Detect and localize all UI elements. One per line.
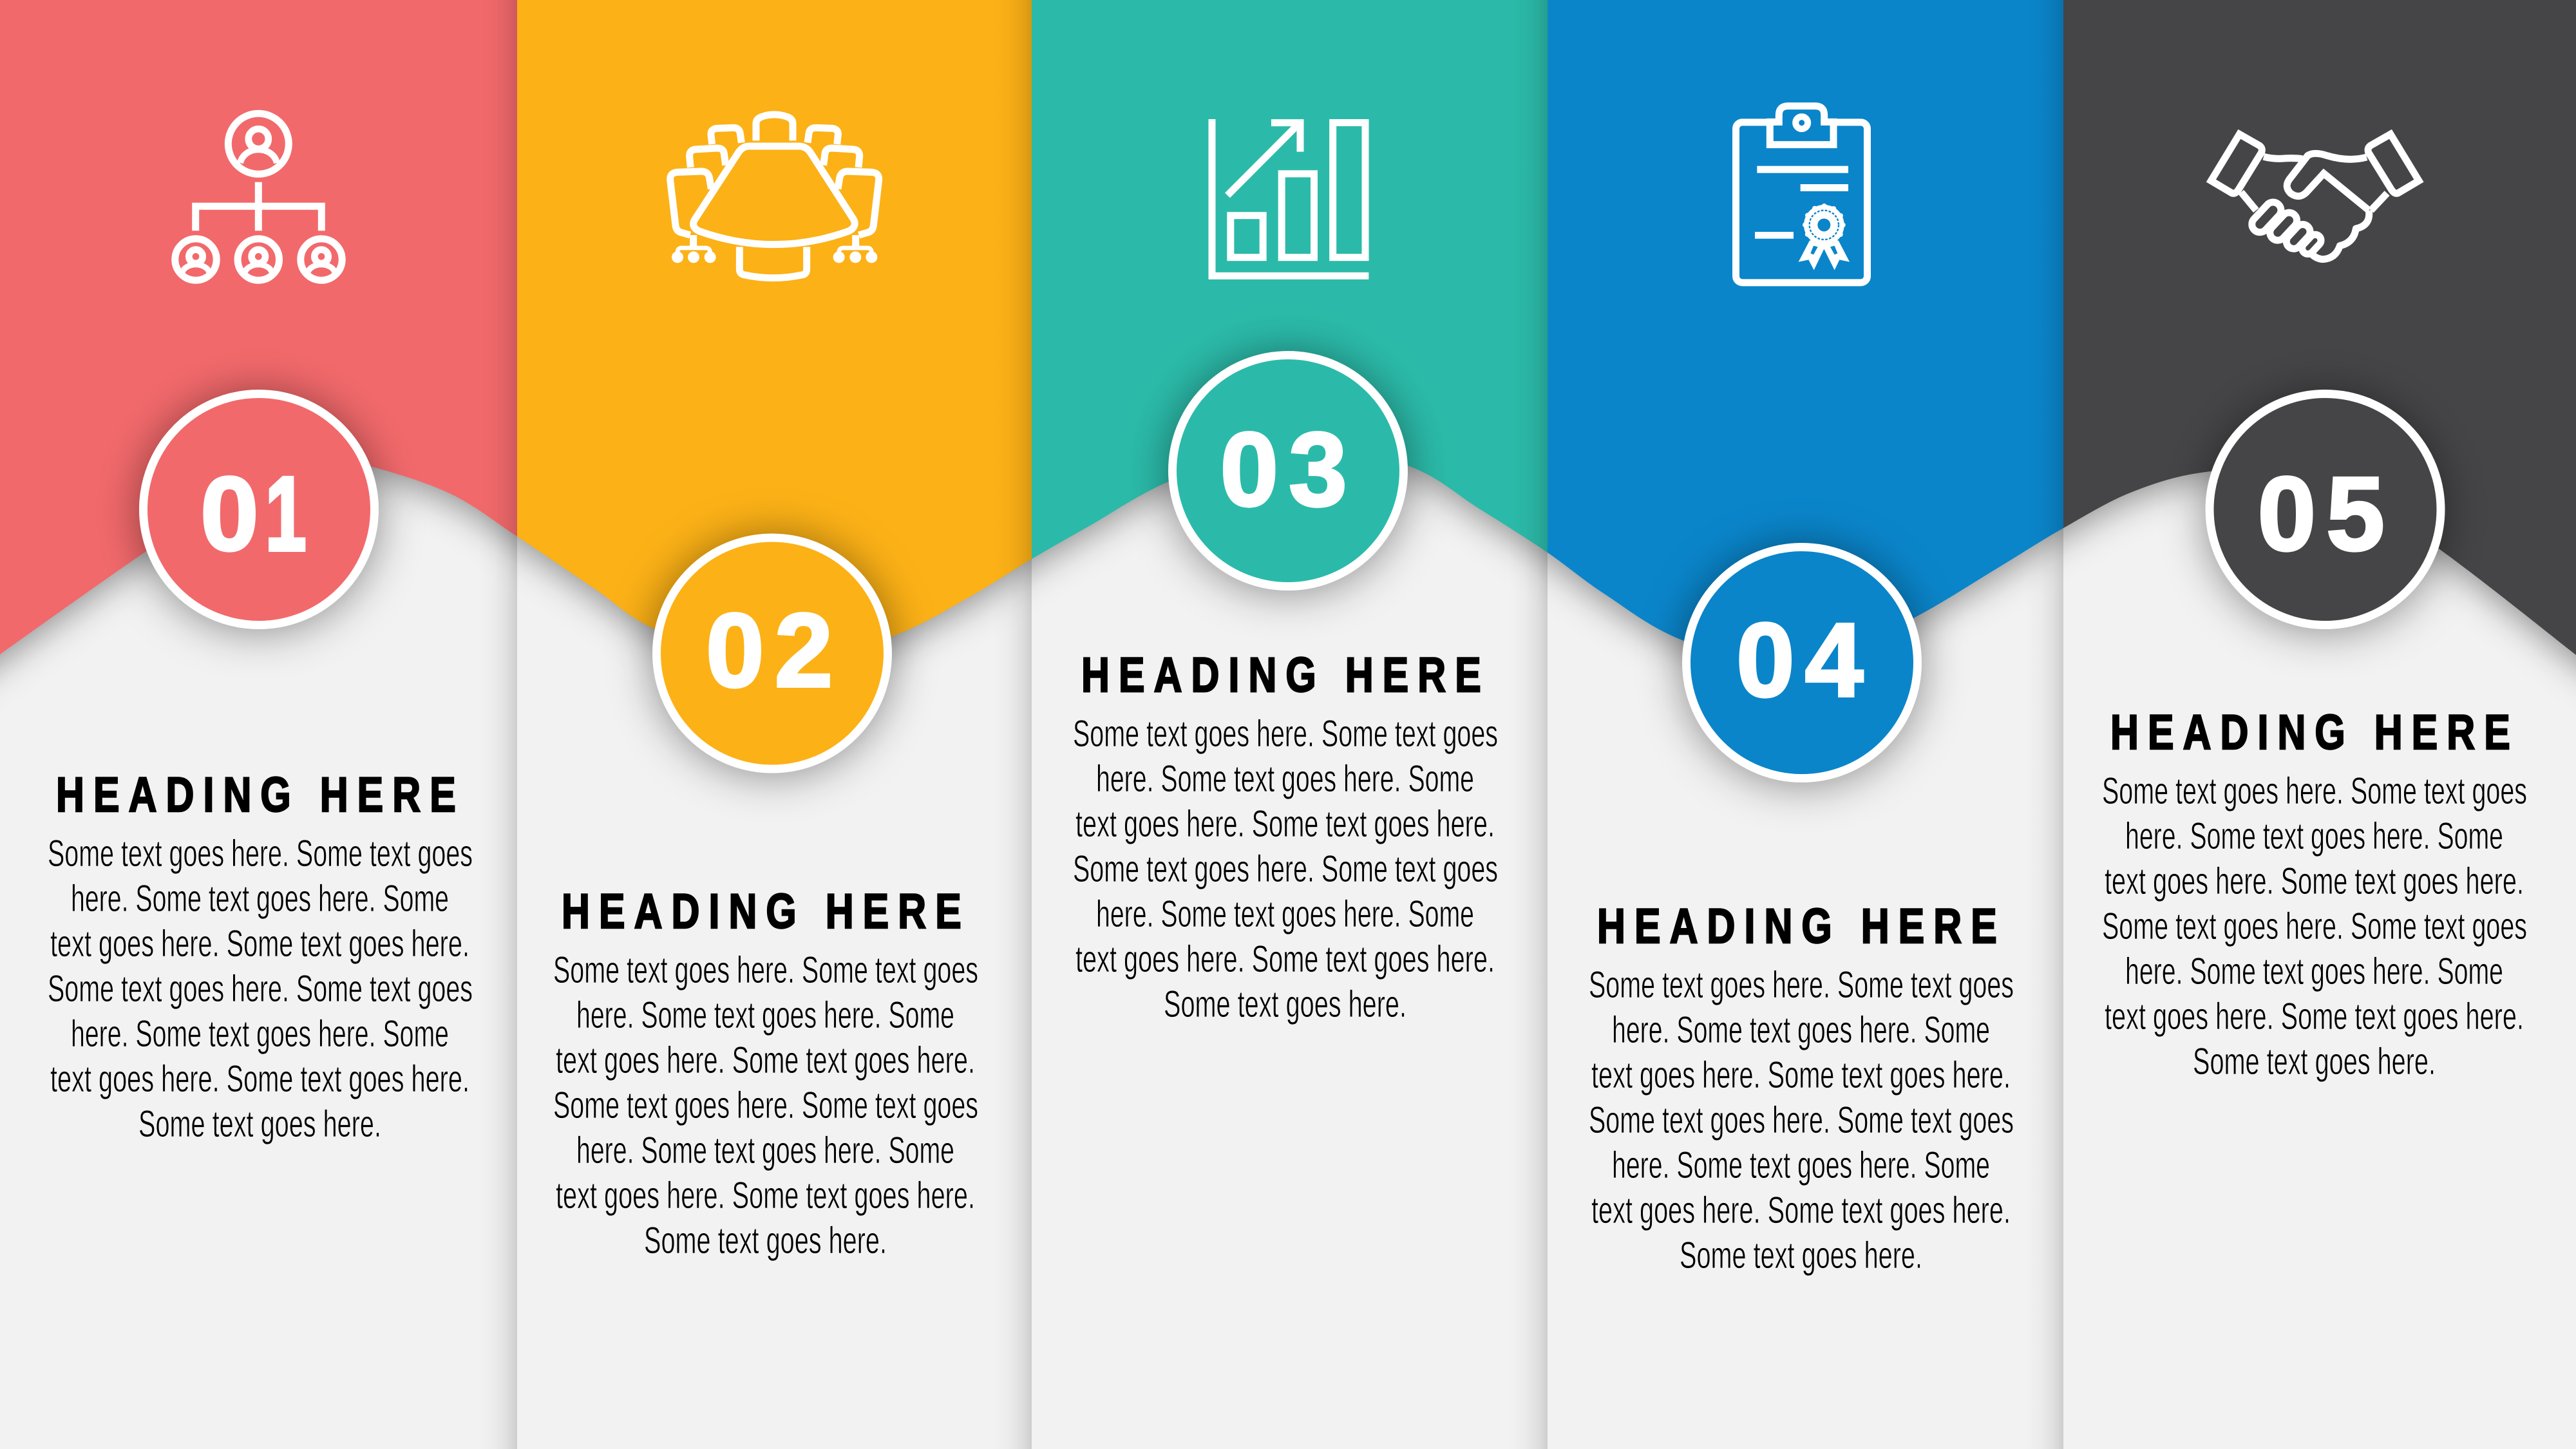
number badge 04: 04 (1736, 601, 1873, 719)
panel: column 01 (0, 0, 517, 1449)
text block 02: Some text goes here. Some text goes (553, 949, 978, 991)
text block 04: Some text goes here. Some text goes (1589, 1099, 2014, 1141)
text block 04: text goes here. Some text goes here. (1591, 1054, 2011, 1096)
text block 05: HEADING HERE (2110, 705, 2510, 760)
number badge 02 (652, 536, 892, 775)
number badge 03 (1168, 354, 1408, 593)
text block 04: Some text goes here. Some text goes (1589, 964, 2014, 1006)
text block 02: here. Some text goes here. Some (576, 1130, 954, 1171)
text block 01: Some text goes here. Some text goes (48, 833, 473, 875)
text block 01: text goes here. Some text goes here. (50, 1058, 469, 1100)
text block 04: here. Some text goes here. Some (1612, 1009, 1990, 1051)
text block 03 (1073, 648, 1498, 1025)
icon: org chart (175, 113, 342, 280)
panel: column 05 (2063, 0, 2576, 1083)
text block 02 (553, 884, 978, 1262)
text block 03: text goes here. Some text goes here. (1075, 938, 1495, 980)
icon: boardroom table (670, 115, 879, 278)
text block 02: Some text goes here. Some text goes (553, 1084, 978, 1126)
text block 02: HEADING HERE (562, 884, 961, 939)
text block 04: text goes here. Some text goes here. (1591, 1189, 2011, 1231)
text block 01: text goes here. Some text goes here. (50, 923, 469, 965)
number badge 01: 1 (265, 455, 314, 573)
icon: rising bar chart (1212, 119, 1368, 276)
number badge 01: 0 (200, 455, 269, 573)
teal wave header (1032, 0, 1548, 559)
number badge 05 (2205, 392, 2445, 632)
text block 04: HEADING HERE (1597, 899, 1997, 954)
panel: column 03 (1032, 0, 1548, 1449)
text block 01: HEADING HERE (56, 768, 456, 822)
icon: clipboard certificate (1736, 106, 1867, 283)
text block 05: Some text goes here. (2193, 1041, 2436, 1083)
number badge 01 (139, 392, 379, 632)
text block 02: text goes here. Some text goes here. (556, 1039, 975, 1081)
blue wave header (1548, 0, 2063, 708)
text block 03: Some text goes here. Some text goes (1073, 848, 1498, 890)
text block 03: Some text goes here. Some text goes (1073, 713, 1498, 755)
number badge 02: 02 (706, 591, 843, 709)
text block 04: here. Some text goes here. Some (1612, 1144, 1990, 1186)
text block 01: Some text goes here. (138, 1103, 381, 1145)
text block 02: text goes here. Some text goes here. (556, 1175, 975, 1217)
text block 01 (48, 768, 473, 1145)
text block 03: here. Some text goes here. Some (1096, 893, 1474, 935)
panel: column 04 (1548, 0, 2063, 1449)
number badge 04 (1682, 545, 1922, 785)
coral wave header (0, 0, 517, 708)
text block 01: Some text goes here. Some text goes (48, 968, 473, 1010)
text block 04: Some text goes here. (1680, 1235, 1922, 1276)
yellow wave header (517, 0, 1032, 637)
number badge 03: 03 (1220, 410, 1358, 528)
text block 03: HEADING HERE (1081, 648, 1481, 703)
text block 03: Some text goes here. (1164, 983, 1406, 1025)
text block 05 (2102, 705, 2527, 1083)
text block 04 (1589, 899, 2014, 1276)
charcoal wave header (2063, 0, 2576, 708)
text block 02: Some text goes here. (644, 1220, 887, 1262)
icon: handshake (2211, 134, 2419, 260)
text block 01: here. Some text goes here. Some (71, 1013, 449, 1055)
number badge 05: 05 (2258, 455, 2395, 573)
text block 03: here. Some text goes here. Some (1096, 758, 1474, 800)
text block 01: here. Some text goes here. Some (71, 878, 449, 920)
text block 03: text goes here. Some text goes here. (1075, 803, 1495, 845)
text block 02: here. Some text goes here. Some (576, 994, 954, 1036)
panel: column 02 (517, 0, 1032, 1449)
